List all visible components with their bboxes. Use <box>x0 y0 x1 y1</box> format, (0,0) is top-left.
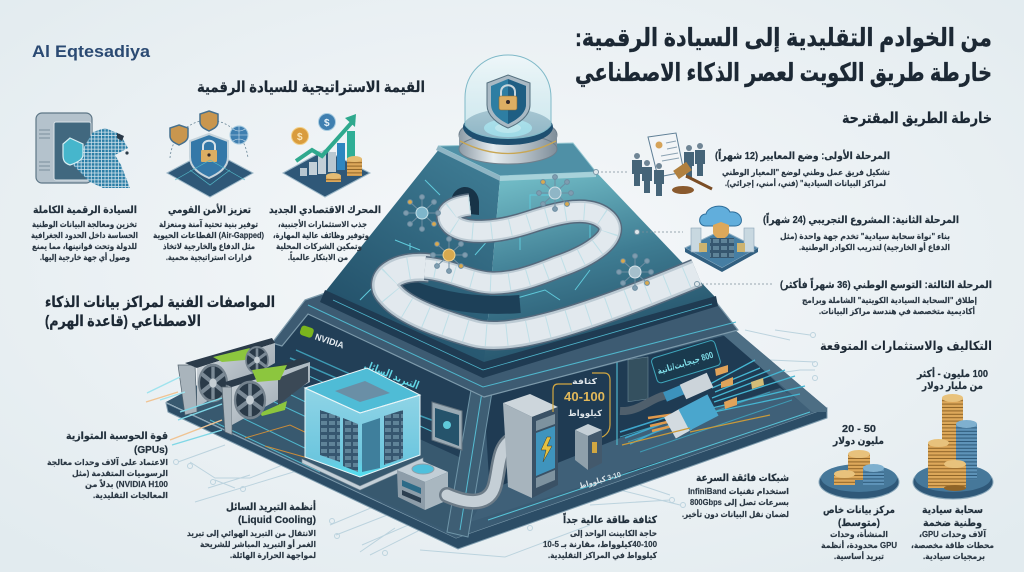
text: liquid cooling <box>187 500 316 561</box>
heading: costs: التكاليف والاستثمارات المتوقعة <box>820 339 992 353</box>
coolant pump box <box>397 460 448 510</box>
text: phase one: المرحلة الأولى: وضع المعايير (12 شهراً) <box>715 148 890 162</box>
text: phase three <box>780 277 992 317</box>
background circuit traces <box>174 330 818 557</box>
capstone plate <box>436 143 596 181</box>
text: phase three: المرحلة الثالثة: التوسع الوطني (36 شهراً فأكثر) <box>780 277 992 291</box>
text: medium cost figure: 20 - 50 <box>842 424 876 435</box>
text: high speed networks: شبكات فائقة السرعة <box>696 473 789 484</box>
text: GPUs: (GPUs) <box>134 445 168 456</box>
GPU card front <box>222 358 310 435</box>
pyramid left face <box>325 148 500 365</box>
title <box>575 24 992 88</box>
text: liquid cooling: الغمر أو التبريد المباشر للشريحة <box>200 539 316 550</box>
text: national cloud: سحابة سيادية <box>922 505 983 516</box>
text: national security: قرارات استراتيجية محمية. <box>166 253 252 263</box>
text: national cloud: وطنية ضخمة <box>923 518 982 529</box>
text: power density: حاجة الكابينت الواحد إلى <box>570 529 657 539</box>
tunnel arch <box>451 187 479 215</box>
text: private data center: المنشأة، وحدات <box>830 529 888 540</box>
pyramid illustration <box>146 55 827 549</box>
text: full sovereignty: السيادة الرقمية الكاملة <box>33 205 137 216</box>
wall gauge panel <box>432 402 462 450</box>
left room: back wall and floor <box>166 305 480 533</box>
text: national security <box>153 203 264 263</box>
text: private data center: GPU محدودة، أنظمة <box>821 540 897 551</box>
heading: technical specs <box>45 294 275 330</box>
network speed panel <box>651 340 721 384</box>
data packets <box>715 365 764 409</box>
text: full sovereignty: للدولة وتحت قوانينها، مما يمنع <box>32 242 137 252</box>
right room: walls and floor <box>470 335 815 522</box>
floor label: 3-10 kW: 3-10 كيلوواط <box>578 470 622 490</box>
power density callout: 40-100 <box>564 390 605 404</box>
small legacy server <box>575 424 602 470</box>
text: high speed networks: لضمان نقل البيانات دون تأخير. <box>682 509 789 520</box>
text: large cost figure: من مليار دولار <box>921 381 983 392</box>
icon: growth chart: $ <box>297 132 303 143</box>
heading: strategic value: القيمة الاستراتيجية للسيادة الرقمية <box>197 79 425 96</box>
NVIDIA logo <box>298 325 346 351</box>
text: economic engine: جذب الاستثمارات الأجنبية، <box>278 219 367 230</box>
pyramid right face <box>484 172 716 365</box>
text: private data center: مركز بيانات خاص <box>823 505 895 516</box>
network node: left upper <box>404 195 440 231</box>
text: medium cost figure: مليون دولار <box>832 436 884 447</box>
text: national security: مثل الدفاع والخارجية لاتخاذ <box>163 242 255 252</box>
icon: growth chart: $ <box>324 118 330 129</box>
text: high speed networks <box>682 473 789 520</box>
text: liquid cooling: لمواجهة الحرارة الهائلة. <box>230 551 316 561</box>
text: high speed networks: استخدام تقنيات InfiniBand <box>688 487 789 497</box>
GPU card rear <box>178 338 275 415</box>
text: national security: توفير بنية تحتية آمنة ومنعزلة <box>159 219 258 230</box>
text: liquid cooling: أنظمة التبريد السائل <box>226 500 316 513</box>
text: GPUs: الرسوميات المتقدمة (مثل <box>72 469 168 479</box>
text: power density: كيلوواط في المراكز التقليدية. <box>548 551 657 561</box>
text: economic engine: من الابتكار عالمياً. <box>288 251 348 263</box>
icon: sovereign cloud <box>685 206 758 272</box>
text: large cost figure <box>916 367 988 392</box>
network node: right lower <box>617 254 653 290</box>
text: phase three: أكاديمية متخصصة في هندسة مراكز البيانات. <box>819 306 975 317</box>
text: economic engine: وتمكين الشركات المحلية <box>276 242 362 252</box>
text: phase one <box>715 148 890 189</box>
pyramid dark skirt <box>320 290 718 378</box>
power density callout: كثافة <box>572 377 597 386</box>
icon: shield on platform <box>167 111 253 197</box>
text: high speed networks: بسرعات تصل إلى 800Gbps <box>690 498 789 508</box>
text: private data center: (متوسط) <box>838 518 880 529</box>
text: liquid cooling: (Liquid Cooling) <box>238 515 316 526</box>
winding road: upper run <box>425 205 610 283</box>
text: phase one: تشكيل فريق عمل وطني لوضع "المعيار الوطني <box>722 168 890 178</box>
text: private data center: تبريد أساسية. <box>834 551 884 562</box>
text: power density: 40-100كيلوواط، مقارنة بـ 5-10 <box>543 540 657 550</box>
speed lines <box>146 377 222 445</box>
roof band <box>272 288 738 397</box>
hairpin shadow <box>400 285 520 305</box>
wall label: liquid cooling: التبريد السائل <box>362 359 421 392</box>
text: national cloud: آلاف وحدات GPU، <box>919 529 986 540</box>
NVIDIA logo: NVIDIA <box>314 332 346 351</box>
text: full sovereignty: وصول أي جهة خارجية إليها. <box>40 252 130 263</box>
network speed panel: 800 جيجابت/ثانية <box>656 350 714 376</box>
leader nodes <box>594 170 700 286</box>
text: GPUs: NVIDIA H100) بدلاً من <box>85 479 168 490</box>
text: GPUs: المعالجات التقليدية. <box>93 491 168 500</box>
text: GPUs: قوة الحوسبة المتوازية <box>66 431 168 442</box>
pyramid circuit decorations <box>360 180 590 300</box>
text: power density <box>543 512 657 561</box>
heading: roadmap: خارطة الطريق المقترحة <box>842 110 992 127</box>
shield with padlock <box>487 75 530 128</box>
power density callout <box>553 373 610 442</box>
text: national cloud: برمجيات سيادية. <box>923 552 985 562</box>
corner pillar and right column <box>447 330 827 537</box>
leader lines <box>597 172 773 284</box>
power density callout: كيلوواط <box>568 408 602 419</box>
text: economic engine <box>269 205 381 263</box>
text: power density: كثافة طاقة عالية جداً <box>563 512 657 526</box>
text: large cost figure: 100 مليون - أكثر <box>916 367 988 380</box>
heading: technical specs: المواصفات الفنية لمراكز بيانات الذكاء <box>45 294 275 311</box>
text: medium cost figure <box>832 424 884 447</box>
text: full sovereignty: الحساسة داخل الحدود الجغرافية <box>31 231 138 241</box>
text: GPUs: الاعتماد على آلاف وحدات معالجة <box>47 457 168 468</box>
text: national security: تعزيز الأمن القومي <box>168 203 251 216</box>
text: liquid cooling: الانتقال من التبريد الهوائي إلى تبريد <box>187 529 316 539</box>
coin stacks: national cloud <box>913 394 993 499</box>
icon: growth chart <box>283 114 370 197</box>
network node: gold <box>431 237 467 273</box>
text: national security: (Air-Gapped) القطاعات الحيوية <box>153 231 264 241</box>
dome with shield <box>459 55 557 164</box>
coin stacks: private data center <box>819 450 899 499</box>
text: phase three: إطلاق "السحابة السيادية الكويتية" الشاملة وبرامج <box>802 296 977 306</box>
icon: data vault and map <box>36 113 130 188</box>
network node: right upper <box>537 175 573 211</box>
text: phase two: بناء "نواة سحابة سيادية" تخدم جهة واحدة (مثل <box>780 232 950 242</box>
power server <box>503 394 558 498</box>
text: GPUs <box>47 431 168 500</box>
liquid cooling tank <box>302 368 423 490</box>
text: phase one: لمراكز البيانات السيادية" (فني، أمني، إجرائي). <box>725 178 886 189</box>
winding road: lower run <box>386 267 697 336</box>
text: phase two: الدفاع أو الخارجية) لتدريب الكوادر الوطنية. <box>799 242 950 253</box>
text: phase two <box>763 212 959 253</box>
base platform <box>166 330 827 549</box>
text: national cloud <box>911 505 994 562</box>
text: economic engine: وتوفير وظائف عالية المهارة، <box>273 231 369 241</box>
coolant pipe <box>447 438 515 502</box>
network cables <box>620 360 805 445</box>
text: private data center <box>821 505 897 562</box>
text: full sovereignty <box>31 205 138 263</box>
text: full sovereignty: تخزين ومعالجة البيانات الوطنية <box>32 220 137 230</box>
heading: technical specs: الاصطناعي (قاعدة الهرم) <box>45 313 201 330</box>
text: national cloud: محطات طاقة مخصصة، <box>911 541 994 550</box>
text: economic engine: المحرك الاقتصادي الجديد <box>269 205 381 216</box>
icon: officials, document and gavel <box>632 133 712 196</box>
logo: Al Eqtesadiya <box>32 42 151 61</box>
text: phase two: المرحلة الثانية: المشروع التجريبي (24 شهراً) <box>763 212 959 226</box>
